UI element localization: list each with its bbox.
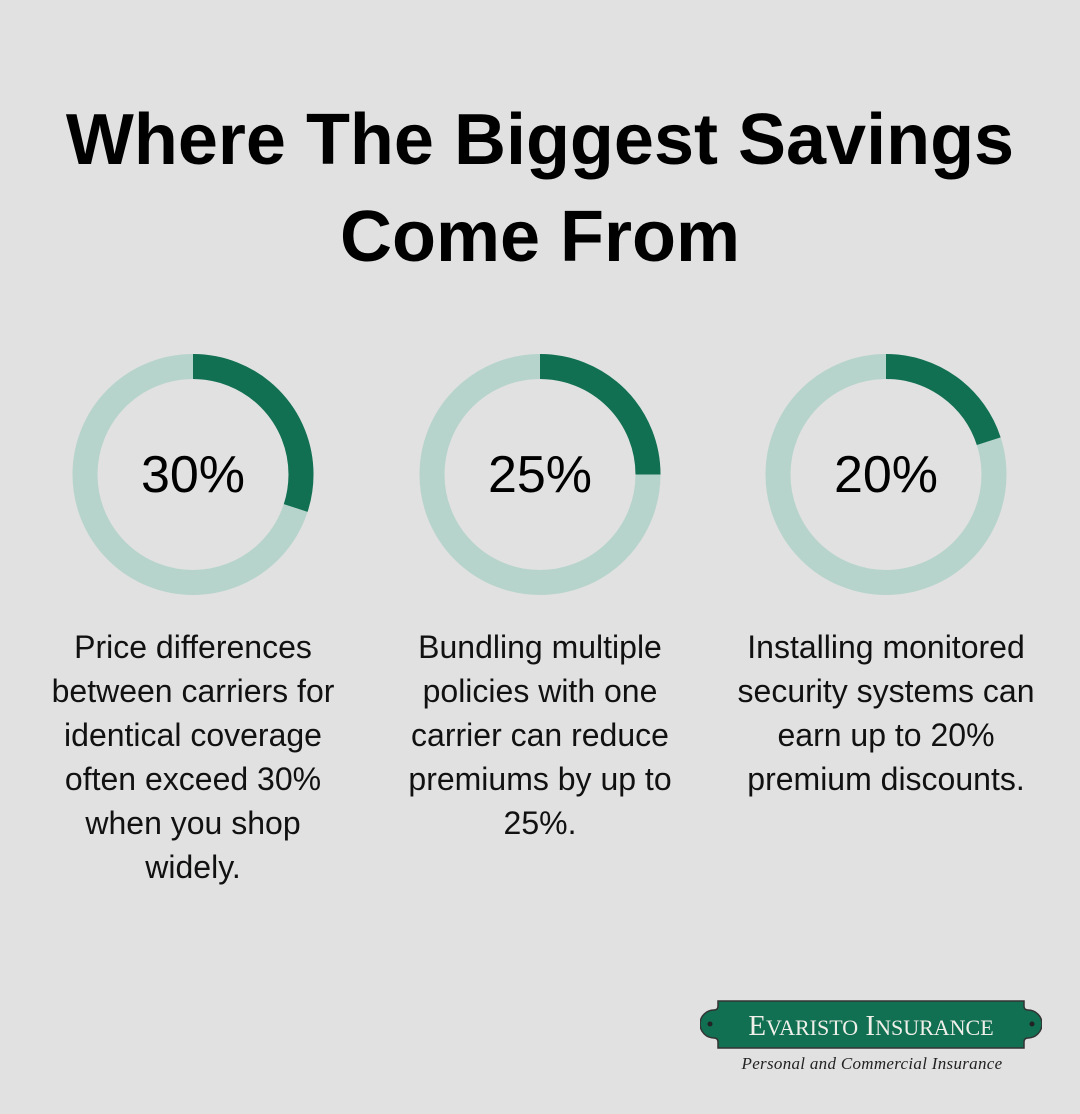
logo: Personal and Commercial Insurance: [741, 1054, 1003, 1073]
text: security systems: premium discounts.: [747, 761, 1025, 797]
text: price differences: [52, 629, 334, 885]
logo: EVARISTO INSURANCE: [748, 1010, 994, 1042]
title: Where The Biggest Savings: [66, 100, 1014, 180]
text: price differences: Price differences: [74, 629, 312, 665]
text: bundling: [408, 629, 672, 841]
text: bundling: policies with one: [423, 673, 657, 709]
donut: 20%: [778, 366, 994, 582]
donut: 30%: [85, 366, 301, 582]
text: security systems: Installing monitored: [747, 629, 1025, 665]
donut: 30%: 30%: [141, 446, 245, 504]
text: security systems: [738, 629, 1034, 797]
logo: [700, 1000, 1042, 1073]
text: price differences: widely.: [145, 849, 241, 885]
donut: 25%: 25%: [488, 446, 592, 504]
text: security systems: earn up to 20%: [777, 717, 995, 753]
text: bundling: premiums by up to: [408, 761, 672, 797]
text: security systems: security systems can: [738, 673, 1034, 709]
text: price differences: when you shop: [85, 805, 301, 841]
donut: 25%: [432, 366, 648, 582]
title: [66, 100, 1014, 277]
text: price differences: between carriers for: [52, 673, 334, 709]
text: price differences: identical coverage: [64, 717, 322, 753]
text: bundling: 25%.: [504, 805, 576, 841]
donut: 20%: 20%: [834, 446, 938, 504]
text: price differences: often exceed 30%: [65, 761, 321, 797]
text: bundling: carrier can reduce: [411, 717, 669, 753]
text: bundling: Bundling multiple: [418, 629, 662, 665]
donut charts: [72, 354, 1006, 595]
title: Come From: [340, 197, 740, 277]
